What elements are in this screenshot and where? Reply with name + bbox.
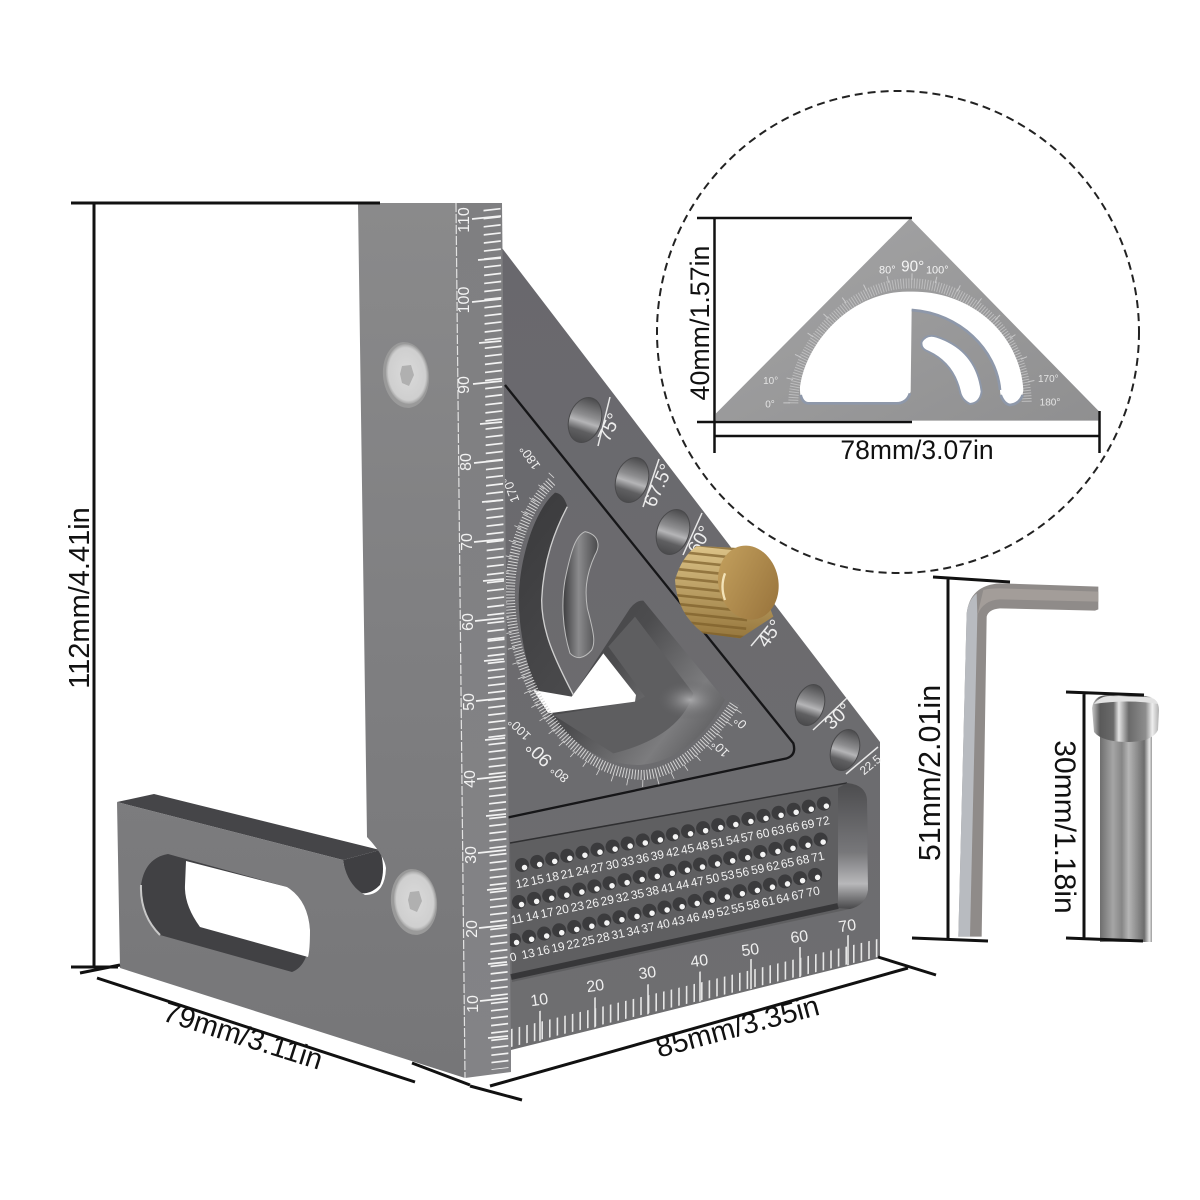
peg hole numbers: 19	[550, 939, 566, 956]
horizontal ruler numbers	[529, 917, 857, 1010]
panel: protractor triangle detail: 90°	[901, 258, 924, 275]
peg hole numbers: 16	[535, 942, 551, 959]
dimension: width 79mm	[80, 965, 470, 1085]
panel: protractor triangle detail: 0°	[765, 399, 775, 410]
peg hole numbers: 39	[649, 847, 666, 864]
peg hole numbers: 15	[529, 872, 545, 888]
dimension: height 112mm: 112mm/4.41in	[64, 507, 96, 689]
infographic canvas	[68, 90, 1159, 1102]
peg hole numbers: 45	[680, 841, 696, 857]
peg hole numbers: 32	[614, 889, 631, 906]
peg hole numbers: 34	[625, 923, 641, 939]
peg hole numbers: 57	[740, 829, 756, 845]
panel: left bracket and fence face	[117, 203, 465, 1078]
peg hole numbers: 65	[779, 855, 796, 871]
panel: protractor section: 10°	[709, 736, 732, 760]
dimension: width 79mm: 79mm/3.11in	[159, 996, 326, 1077]
vertical ruler numbers: 20	[464, 920, 481, 938]
vertical ruler numbers: 30	[463, 846, 480, 864]
icon: brass knob	[675, 546, 779, 638]
peg hole numbers: 25	[580, 932, 596, 949]
horizontal ruler numbers: 60	[789, 928, 809, 947]
peg hole numbers: 54	[725, 832, 741, 848]
dimension: pin 30mm: 30mm/1.18in	[1048, 740, 1081, 914]
peg hole numbers: 0	[508, 949, 518, 965]
horizontal ruler numbers: 50	[740, 941, 760, 960]
panel: protractor triangle detail: 170°	[1038, 374, 1059, 385]
panel: protractor triangle detail	[716, 218, 1098, 421]
peg hole rows	[514, 802, 834, 943]
peg hole numbers: 52	[715, 903, 732, 920]
icon: top screw	[380, 340, 432, 410]
horizontal ruler scale	[511, 928, 878, 1048]
panel: protractor section: 180°	[517, 443, 543, 472]
peg hole numbers: 14	[524, 908, 540, 924]
peg hole numbers: 17	[539, 905, 556, 921]
angle markers: 67.5°	[640, 461, 678, 510]
peg hole numbers: 64	[775, 890, 791, 907]
peg hole numbers: 59	[750, 861, 766, 877]
panel: vertical ruler strip	[456, 203, 511, 1078]
peg hole numbers: 11	[510, 911, 525, 927]
angle markers: 45°	[754, 616, 787, 652]
peg hole numbers: 21	[559, 866, 576, 882]
panel: protractor section	[480, 385, 794, 823]
peg hole numbers: 43	[670, 913, 686, 929]
peg hole numbers: 50	[705, 870, 721, 887]
panel: protractor triangle detail: 10°	[763, 376, 778, 387]
peg hole numbers: 72	[815, 813, 831, 830]
panel: triangular blade body	[495, 248, 880, 1050]
dimension: triangle sizes: 78mm/3.07in	[840, 435, 994, 465]
peg hole numbers: 42	[665, 844, 681, 860]
peg hole numbers: 44	[675, 877, 691, 893]
peg hole numbers: 28	[595, 929, 611, 946]
horizontal ruler numbers: 20	[585, 977, 605, 996]
bracket slot	[141, 854, 310, 972]
vertical ruler numbers: 70	[459, 533, 476, 551]
peg hole numbers: 63	[770, 822, 786, 839]
peg hole numbers: 67	[790, 887, 806, 903]
dimension: hex key 51mm: 51mm/2.01in	[913, 685, 947, 861]
peg hole numbers: 31	[610, 926, 626, 942]
dimension: triangle sizes: 40mm/1.57in	[685, 246, 715, 400]
peg hole numbers: 37	[640, 919, 656, 936]
dimension: pin 30mm	[1048, 692, 1144, 941]
panel: protractor triangle detail: 80°	[879, 264, 896, 276]
horizontal ruler numbers: 30	[637, 964, 657, 983]
callout: dashed circle	[657, 91, 1139, 573]
panel: angle holes on hypotenuse	[563, 393, 865, 774]
peg hole numbers: 30	[604, 856, 621, 873]
panel: T-track recess	[510, 783, 868, 982]
vertical ruler numbers: 40	[462, 770, 479, 788]
peg hole numbers: 69	[800, 816, 816, 833]
peg hole numbers: 53	[720, 867, 736, 884]
vertical ruler numbers: 100	[456, 287, 473, 313]
panel: protractor triangle detail: 100°	[926, 264, 949, 276]
peg hole numbers: 12	[514, 875, 530, 891]
vertical ruler numbers	[456, 207, 482, 1013]
peg hole numbers: 46	[685, 910, 701, 926]
peg hole numbers: 62	[765, 858, 781, 874]
peg hole numbers: 68	[795, 852, 811, 868]
peg hole numbers: 24	[574, 862, 591, 879]
panel: protractor section: 90°	[521, 737, 556, 771]
peg hole numbers: 13	[520, 945, 536, 962]
angle markers: 75°	[594, 410, 626, 445]
peg hole numbers: 40	[655, 916, 671, 933]
peg hole numbers: 66	[785, 819, 801, 836]
peg hole numbers: 29	[599, 892, 616, 909]
peg hole numbers: 33	[619, 853, 636, 870]
vertical ruler numbers: 10	[465, 995, 482, 1013]
vertical ruler numbers: 90	[456, 376, 473, 394]
angle markers: 60°	[684, 523, 717, 558]
horizontal ruler numbers: 70	[837, 917, 857, 936]
peg hole numbers: 49	[700, 906, 716, 923]
peg hole numbers: 26	[584, 895, 601, 912]
peg hole numbers: 35	[629, 886, 646, 902]
vertical ruler numbers: 110	[456, 207, 473, 233]
peg hole numbers: 36	[635, 850, 651, 867]
dimension: height 112mm	[64, 203, 380, 968]
dimension: width 85mm	[470, 957, 936, 1100]
panel: protractor section: 0°	[731, 713, 750, 731]
horizontal ruler numbers: 10	[529, 991, 549, 1010]
panel: protractor section: 170°	[500, 475, 522, 504]
vertical ruler numbers: 50	[461, 693, 478, 711]
dimension: triangle sizes	[685, 218, 1100, 465]
vertical ruler numbers: 60	[460, 613, 477, 631]
peg hole numbers	[508, 813, 831, 965]
angle markers	[594, 397, 884, 778]
panel: protractor triangle detail: 180°	[1040, 398, 1060, 409]
peg hole numbers: 71	[810, 849, 826, 865]
dimension: width 85mm: 85mm/3.35in	[653, 990, 823, 1064]
peg hole numbers: 18	[544, 869, 561, 885]
peg hole numbers: 55	[730, 900, 746, 916]
peg hole numbers: 58	[745, 896, 761, 913]
peg hole numbers: 56	[734, 864, 751, 881]
peg hole numbers: 22	[565, 936, 581, 952]
peg hole numbers: 27	[589, 859, 606, 876]
vertical ruler numbers: 80	[458, 453, 475, 471]
peg hole numbers: 38	[644, 883, 661, 899]
icon: locating pin	[1092, 695, 1159, 942]
angle markers: 22.5	[857, 752, 884, 778]
peg hole numbers: 48	[694, 838, 711, 854]
panel: protractor section: 80°	[548, 762, 572, 785]
peg hole numbers: 20	[554, 901, 571, 918]
horizontal ruler numbers: 40	[689, 952, 709, 971]
peg hole numbers: 61	[760, 893, 776, 910]
peg hole numbers: 23	[569, 898, 586, 915]
peg hole numbers: 41	[660, 880, 676, 896]
peg hole numbers: 47	[689, 873, 706, 890]
angle markers: 30°	[821, 699, 856, 734]
peg hole numbers: 60	[755, 825, 771, 842]
icon: hex key	[958, 583, 1098, 937]
dimension: hex key 51mm	[912, 577, 1010, 941]
icon: bottom screw	[388, 867, 440, 937]
panel: protractor section: 100°	[505, 715, 534, 743]
peg hole numbers: 70	[805, 883, 821, 900]
peg hole numbers: 51	[710, 835, 726, 851]
